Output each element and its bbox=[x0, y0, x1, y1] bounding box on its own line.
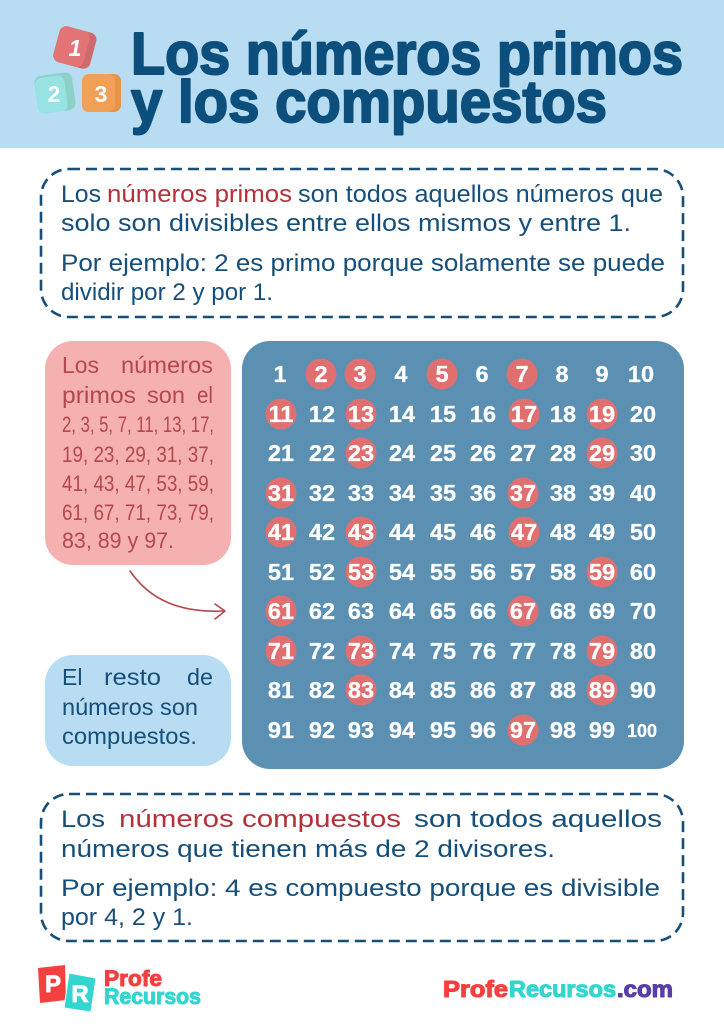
panel: list of primes bbox=[45, 341, 231, 565]
grid numbers: 76 bbox=[470, 638, 496, 664]
panel: composite definition: números que tienen más de 2 divisores. bbox=[61, 836, 555, 863]
grid numbers: 6 bbox=[475, 361, 489, 387]
grid numbers: 22 bbox=[309, 440, 335, 466]
grid numbers: 37 bbox=[510, 480, 536, 506]
grid numbers: 69 bbox=[589, 598, 615, 624]
grid numbers: 78 bbox=[550, 638, 576, 664]
grid numbers: 51 bbox=[268, 559, 294, 585]
grid numbers: 90 bbox=[630, 677, 656, 703]
grid numbers: 2 bbox=[314, 361, 328, 387]
grid numbers: 29 bbox=[589, 440, 615, 466]
panel: prime definition: dividir por 2 y por 1. bbox=[61, 279, 273, 306]
panel: list of primes: números bbox=[121, 352, 213, 378]
grid numbers: 94 bbox=[389, 717, 415, 743]
grid numbers: 39 bbox=[589, 480, 615, 506]
grid numbers: 84 bbox=[389, 677, 415, 703]
panel: list of primes: primos bbox=[62, 382, 136, 408]
grid numbers: 35 bbox=[430, 480, 456, 506]
grid numbers: 8 bbox=[555, 361, 569, 387]
grid numbers: 89 bbox=[589, 677, 615, 703]
grid numbers: 72 bbox=[309, 638, 335, 664]
panel: prime definition: números primos bbox=[107, 181, 292, 208]
panel: number grid 1-100 bbox=[242, 341, 684, 769]
grid numbers: 49 bbox=[589, 519, 615, 545]
panel: list of primes: 2, 3, 5, 7, 11, 13, 17, bbox=[62, 412, 214, 437]
grid numbers: 74 bbox=[389, 638, 415, 664]
panel: composite definition: Los bbox=[61, 806, 105, 833]
header band bbox=[0, 0, 724, 148]
grid numbers: 65 bbox=[430, 598, 456, 624]
panel: prime definition: son todos aquellos números que bbox=[298, 181, 663, 208]
grid numbers: 92 bbox=[309, 717, 335, 743]
icon: number blocks: 1 bbox=[69, 35, 81, 61]
grid numbers: 83 bbox=[348, 677, 374, 703]
grid numbers: 54 bbox=[389, 559, 415, 585]
icon: number blocks: 3 bbox=[95, 81, 107, 107]
grid numbers: 75 bbox=[430, 638, 456, 664]
logo: Profe Recursos: R bbox=[71, 981, 89, 1008]
grid numbers: 62 bbox=[309, 598, 335, 624]
website url: Profe bbox=[443, 976, 508, 1002]
grid numbers: 24 bbox=[389, 440, 415, 466]
grid numbers: 11 bbox=[269, 401, 293, 427]
grid numbers: 68 bbox=[550, 598, 576, 624]
grid numbers: 23 bbox=[348, 440, 374, 466]
panel: composite definition bbox=[41, 794, 683, 941]
grid numbers: 91 bbox=[268, 717, 294, 743]
grid numbers: 30 bbox=[630, 440, 656, 466]
grid numbers: 56 bbox=[470, 559, 496, 585]
panel: list of primes: 61, 67, 71, 73, 79, bbox=[62, 500, 214, 525]
grid numbers: 38 bbox=[550, 480, 576, 506]
grid numbers: 42 bbox=[309, 519, 335, 545]
panel: composite note: El bbox=[62, 664, 82, 690]
panel: prime definition: solo son divisibles entre ellos mismos y entre 1. bbox=[61, 210, 631, 237]
grid numbers bbox=[268, 361, 657, 743]
prime highlight circles bbox=[266, 358, 618, 746]
grid numbers: 61 bbox=[268, 598, 294, 624]
grid numbers: 17 bbox=[511, 401, 537, 427]
grid numbers: 99 bbox=[589, 717, 615, 743]
grid numbers: 57 bbox=[510, 559, 536, 585]
panel: list of primes: 41, 43, 47, 53, 59, bbox=[62, 471, 214, 496]
panel: prime definition: Por ejemplo: 2 es primo porque solamente se puede bbox=[61, 250, 665, 277]
grid numbers: 77 bbox=[510, 638, 536, 664]
panel: prime definition: Los bbox=[61, 181, 101, 208]
grid numbers: 12 bbox=[309, 401, 335, 427]
panel: list of primes: son bbox=[147, 382, 185, 408]
grid numbers: 46 bbox=[470, 519, 496, 545]
panel: prime definition bbox=[41, 169, 683, 317]
grid numbers: 52 bbox=[309, 559, 335, 585]
grid numbers: 81 bbox=[268, 677, 294, 703]
grid numbers: 58 bbox=[550, 559, 576, 585]
grid numbers: 96 bbox=[470, 717, 496, 743]
grid numbers: 88 bbox=[550, 677, 576, 703]
website url: Recursos bbox=[509, 976, 616, 1002]
panel: composite definition: números compuestos bbox=[119, 806, 401, 833]
title bbox=[131, 21, 683, 135]
grid numbers: 93 bbox=[348, 717, 374, 743]
grid numbers: 43 bbox=[348, 519, 374, 545]
grid numbers: 3 bbox=[353, 361, 367, 387]
grid numbers: 14 bbox=[389, 401, 415, 427]
icon: number blocks bbox=[34, 25, 121, 114]
panel: composite note: compuestos. bbox=[62, 723, 197, 749]
icon: number blocks: 2 bbox=[48, 81, 60, 107]
grid numbers: 60 bbox=[630, 559, 656, 585]
grid numbers: 31 bbox=[268, 480, 294, 506]
grid numbers: 95 bbox=[430, 717, 456, 743]
grid numbers: 41 bbox=[268, 519, 294, 545]
grid numbers: 64 bbox=[389, 598, 415, 624]
logo: Profe Recursos bbox=[38, 965, 201, 1012]
grid numbers: 53 bbox=[348, 559, 374, 585]
grid numbers: 1 bbox=[273, 361, 287, 387]
title: y los compuestos bbox=[131, 69, 607, 135]
grid numbers: 45 bbox=[430, 519, 456, 545]
grid numbers: 50 bbox=[630, 519, 656, 545]
grid numbers: 10 bbox=[628, 361, 654, 387]
logo: Profe Recursos: P bbox=[45, 971, 61, 998]
grid numbers: 80 bbox=[630, 638, 656, 664]
grid numbers: 4 bbox=[394, 361, 408, 387]
grid numbers: 21 bbox=[268, 440, 294, 466]
grid numbers: 15 bbox=[430, 401, 456, 427]
grid numbers: 87 bbox=[510, 677, 536, 703]
panel: list of primes: 83, 89 y 97. bbox=[62, 528, 174, 553]
grid numbers: 19 bbox=[589, 401, 615, 427]
grid numbers: 36 bbox=[470, 480, 496, 506]
grid numbers: 34 bbox=[389, 480, 415, 506]
grid numbers: 20 bbox=[630, 401, 656, 427]
grid numbers: 71 bbox=[268, 638, 294, 664]
grid numbers: 73 bbox=[348, 638, 374, 664]
grid numbers: 7 bbox=[515, 361, 529, 387]
panel: composite definition: por 4, 2 y 1. bbox=[61, 904, 193, 931]
grid numbers: 85 bbox=[430, 677, 456, 703]
grid numbers: 44 bbox=[389, 519, 415, 545]
grid numbers: 82 bbox=[309, 677, 335, 703]
grid numbers: 48 bbox=[550, 519, 576, 545]
panel: composite definition: son todos aquellos bbox=[414, 806, 662, 833]
panel: composite note: números son bbox=[62, 694, 198, 720]
grid numbers: 5 bbox=[435, 361, 449, 387]
logo: Profe Recursos: Profe bbox=[104, 966, 162, 991]
grid numbers: 13 bbox=[348, 401, 374, 427]
grid numbers: 66 bbox=[470, 598, 496, 624]
grid numbers: 55 bbox=[430, 559, 456, 585]
website url: .com bbox=[617, 976, 673, 1002]
grid numbers: 40 bbox=[630, 480, 656, 506]
arrow bbox=[130, 571, 225, 619]
panel: list of primes: 19, 23, 29, 31, 37, bbox=[62, 442, 214, 467]
grid numbers: 27 bbox=[510, 440, 536, 466]
grid numbers: 100 bbox=[627, 721, 657, 741]
grid numbers: 32 bbox=[309, 480, 335, 506]
logo: Profe Recursos: Recursos bbox=[104, 984, 201, 1009]
grid numbers: 28 bbox=[550, 440, 576, 466]
grid numbers: 63 bbox=[348, 598, 374, 624]
grid numbers: 59 bbox=[589, 559, 615, 585]
panel: composite note bbox=[45, 655, 231, 766]
grid numbers: 67 bbox=[510, 598, 536, 624]
grid numbers: 9 bbox=[595, 361, 609, 387]
grid numbers: 86 bbox=[470, 677, 496, 703]
grid numbers: 47 bbox=[511, 519, 537, 545]
title: Los números primos bbox=[131, 21, 683, 87]
grid numbers: 79 bbox=[589, 638, 615, 664]
panel: composite note: de bbox=[187, 664, 213, 690]
panel: composite definition: Por ejemplo: 4 es compuesto porque es divisible bbox=[61, 875, 660, 902]
grid numbers: 25 bbox=[430, 440, 456, 466]
grid numbers: 98 bbox=[550, 717, 576, 743]
panel: list of primes: Los bbox=[62, 352, 99, 378]
grid numbers: 33 bbox=[348, 480, 374, 506]
grid numbers: 70 bbox=[630, 598, 656, 624]
panel: composite note: resto bbox=[104, 664, 161, 690]
grid numbers: 97 bbox=[510, 717, 536, 743]
panel: list of primes: el bbox=[197, 382, 213, 408]
grid numbers: 18 bbox=[550, 401, 576, 427]
website url bbox=[443, 976, 673, 1002]
grid numbers: 16 bbox=[470, 401, 496, 427]
grid numbers: 26 bbox=[470, 440, 496, 466]
